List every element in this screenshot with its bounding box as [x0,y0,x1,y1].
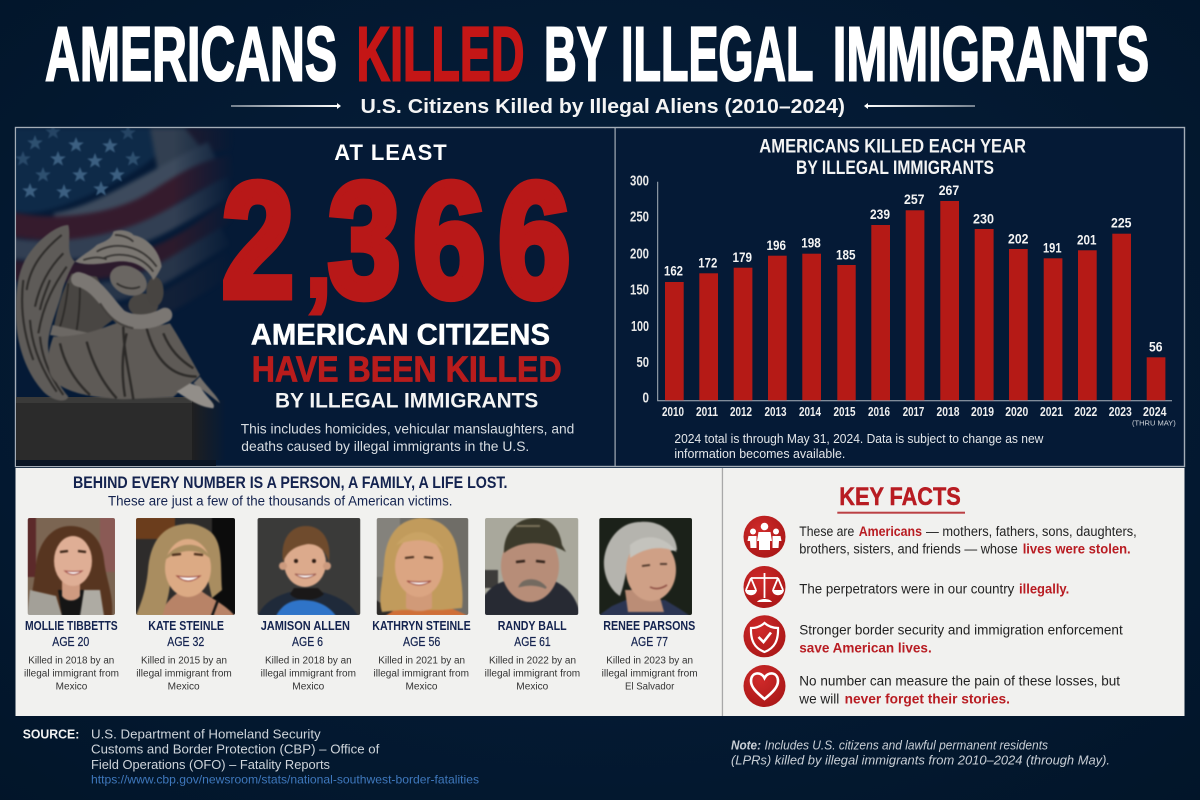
description: Killed in 2021 by an [378,655,465,666]
fact text: lives were stolen. [1023,541,1131,556]
headline: american citizens: HAVE BEEN KILLED [252,349,562,390]
headline: at least: AT LEAST [334,140,447,165]
icon: shield with check [744,615,786,657]
value labels: 267 [939,183,959,198]
big number: 3 [328,148,400,332]
y axis labels: 300 [630,174,649,190]
photo: Renee Parsons [598,517,693,616]
description: Mexico [168,681,200,692]
name and age: JAMISON ALLEN [261,619,350,633]
value labels: 257 [904,192,924,207]
fact text: we will [798,692,839,707]
fact text: The perpetrators were in our country [799,582,1015,597]
chart note: information becomes available. [674,446,845,461]
icon: family [744,516,786,558]
name and age [261,619,350,649]
title: ILLEGAL [621,12,814,98]
x axis labels: 2021 [1040,404,1063,419]
fact text: — mothers, fathers, sons, daughters, [926,524,1137,539]
name and age: MOLLIE TIBBETTS [25,619,118,633]
big number: 6 [413,148,486,332]
x axis labels: 2015 [834,404,856,419]
name and age: AGE 20 [52,635,89,649]
chart title [759,136,1026,179]
name and age [603,619,695,649]
fact 1 [744,516,1137,558]
description [136,655,232,692]
panel: victim Randy Ball [484,517,580,692]
description: illegal immigrant from [24,668,119,679]
value labels: 201 [1077,233,1097,248]
value labels: 185 [836,247,856,262]
text block: description: This includes homicides, vehicular manslaughters, and [241,420,574,436]
subtitle with arrows: U.S. Citizens Killed by Illegal Aliens (2010–2024) [360,96,845,118]
fact text: save American lives. [799,640,932,655]
name and age: AGE 56 [403,635,440,649]
fact text: These are [799,524,854,539]
description [261,655,356,692]
description: Mexico [56,681,88,692]
big number: , [305,194,332,320]
fact text [799,622,1123,655]
value labels: 239 [870,207,890,222]
description [24,655,119,692]
name and age: KATE STEINLE [148,619,224,633]
icon: heart [744,665,786,707]
headline: american citizens [251,318,562,412]
x axis labels: 2017 [903,404,924,419]
icon: scales of justice [744,566,786,608]
description: Killed in 2022 by an [489,655,576,666]
bars [665,201,1165,400]
description: Mexico [516,681,549,692]
value labels: 172 [698,255,717,270]
name and age [372,619,471,649]
fact 4 [744,665,1120,707]
name and age [25,619,118,649]
description: Mexico [292,681,325,692]
panel: statue and flag image [16,128,224,466]
fact text: No number can measure the pain of these losses, but [799,674,1120,689]
y axis labels: 100 [631,319,649,335]
heading: behind every number: BEHIND EVERY NUMBER IS A PERSON, A FAMILY, A LIFE LOST. [73,473,508,492]
title [45,12,1149,98]
x axis labels: 2020 [1005,404,1028,419]
description: illegal immigrant from [261,668,356,679]
x axis labels: 2013 [764,404,786,419]
value labels: 230 [973,211,994,226]
value labels: 56 [1149,340,1163,355]
y axis labels [630,174,649,407]
description: Killed in 2015 by an [141,655,227,666]
name and age: RENEE PARSONS [603,619,695,633]
fact text: illegally. [1019,582,1069,597]
plinth [16,397,226,466]
y axis labels: 150 [630,283,649,299]
name and age: AGE 32 [167,635,204,649]
y axis labels: 50 [636,355,649,371]
chart title: BY ILLEGAL IMMIGRANTS [796,157,994,179]
headline: american citizens: AMERICAN CITIZENS [251,318,550,351]
fact text: brothers, sisters, and friends — whose [799,541,1018,556]
x axis labels: 2022 [1074,404,1097,419]
value labels: 198 [801,236,821,251]
title: KILLED [356,12,524,98]
panel: victim Kathryn Steinle [372,517,471,692]
y axis labels: 250 [630,210,649,226]
photo: Randy Ball [484,517,579,616]
axes [658,182,1172,401]
fact 3 [744,615,1123,657]
panel: victim Mollie Tibbetts [24,517,119,692]
bar chart [630,174,1176,428]
value labels: 179 [732,250,752,265]
panel: victim Jamison Allen [257,517,361,692]
photo: Kate Steinle [135,517,236,616]
big number [222,148,570,332]
source: SOURCE: [23,726,79,741]
note: Includes U.S. citizens and lawful permanent residents [764,738,1048,752]
x axis labels: 2012 [730,404,752,419]
subtitle with arrows [231,96,975,118]
headline: american citizens: BY ILLEGAL IMMIGRANTS [275,388,538,412]
y axis labels: 200 [630,246,649,262]
description: illegal immigrant from [602,668,698,679]
chart note: 2024 total is through May 31, 2024. Data is subject to change as new [674,431,1044,446]
big number: 2 [222,148,294,332]
description: illegal immigrant from [136,668,232,679]
description: Mexico [406,681,438,692]
description: Killed in 2018 by an [265,655,352,666]
title: AMERICANS [45,12,337,98]
x axis labels: 2018 [936,404,960,419]
value labels: 196 [766,238,786,253]
note: (LPRs) killed by illegal immigrants from 2010–2024 (through May). [731,754,1110,768]
panel: victim Kate Steinle [135,517,236,692]
photo: Kathryn Steinle [376,517,469,616]
description: illegal immigrant from [485,668,580,679]
x axis labels: 2014 [799,404,822,419]
name and age [498,619,567,649]
panel: victim Renee Parsons [598,517,698,692]
source: Field Operations (OFO) – Fatality Reports [91,757,330,772]
description: Killed in 2018 by an [28,655,114,666]
fact text: Stronger border security and immigration enforcement [799,622,1123,637]
value labels [664,183,1163,355]
x axis labels: 2024 [1143,404,1167,419]
fact text [799,524,1137,556]
name and age [148,619,224,649]
panel: top frame [16,128,1184,466]
big number: 6 [498,148,570,332]
value labels: 162 [664,264,683,279]
value labels: 202 [1008,231,1028,246]
source: https://www.cbp.gov/newsroom/stats/national-southwest-border-fatalities [91,773,479,786]
x axis labels: 2023 [1109,404,1132,419]
x axis labels: 2010 [662,404,684,419]
x axis labels [662,404,1176,428]
note: Note: [731,738,761,752]
source [23,726,479,786]
y axis labels: 0 [642,391,649,407]
name and age: AGE 6 [292,635,323,649]
fact text: never forget their stories. [845,692,1010,707]
photo: Mollie Tibbetts [27,517,116,616]
heading: behind every number [73,473,508,509]
x axis labels: 2011 [696,404,718,419]
description: El Salvador [625,681,675,692]
name and age: RANDY BALL [498,619,567,633]
divider: frame middle [614,128,616,466]
name and age: AGE 61 [514,635,551,649]
text block: description [241,420,574,454]
name and age: AGE 77 [631,635,668,649]
icon: weeping angel statue [16,225,220,408]
text block: description: deaths caused by illegal immigrants in the U.S. [241,438,529,454]
description [374,655,469,692]
photo: Jamison Allen [257,517,361,616]
heading: key facts: KEY FACTS [839,483,961,511]
fact text [798,674,1120,707]
chart title: AMERICANS KILLED EACH YEAR [759,136,1026,158]
x axis labels: (THRU MAY) [1132,419,1176,428]
title: BY [544,12,607,98]
heading: behind every number: These are just a few of the thousands of American victims. [108,494,452,509]
name and age: KATHRYN STEINLE [372,619,471,633]
description [485,655,580,692]
description: Killed in 2023 by an [606,655,693,666]
source: Customs and Border Protection (CBP) – Office of [91,742,380,757]
value labels: 225 [1111,216,1132,231]
fact text: Americans [859,524,922,539]
panel: victims and key facts background [16,468,1184,716]
note [731,738,1110,768]
source: U.S. Department of Homeland Security [91,726,321,741]
chart note [674,431,1044,461]
x axis labels: 2016 [868,404,890,419]
value labels: 191 [1043,241,1062,256]
description [602,655,698,692]
x axis labels: 2019 [971,404,994,419]
fact 2 [744,566,1069,608]
description: illegal immigrant from [374,668,469,679]
